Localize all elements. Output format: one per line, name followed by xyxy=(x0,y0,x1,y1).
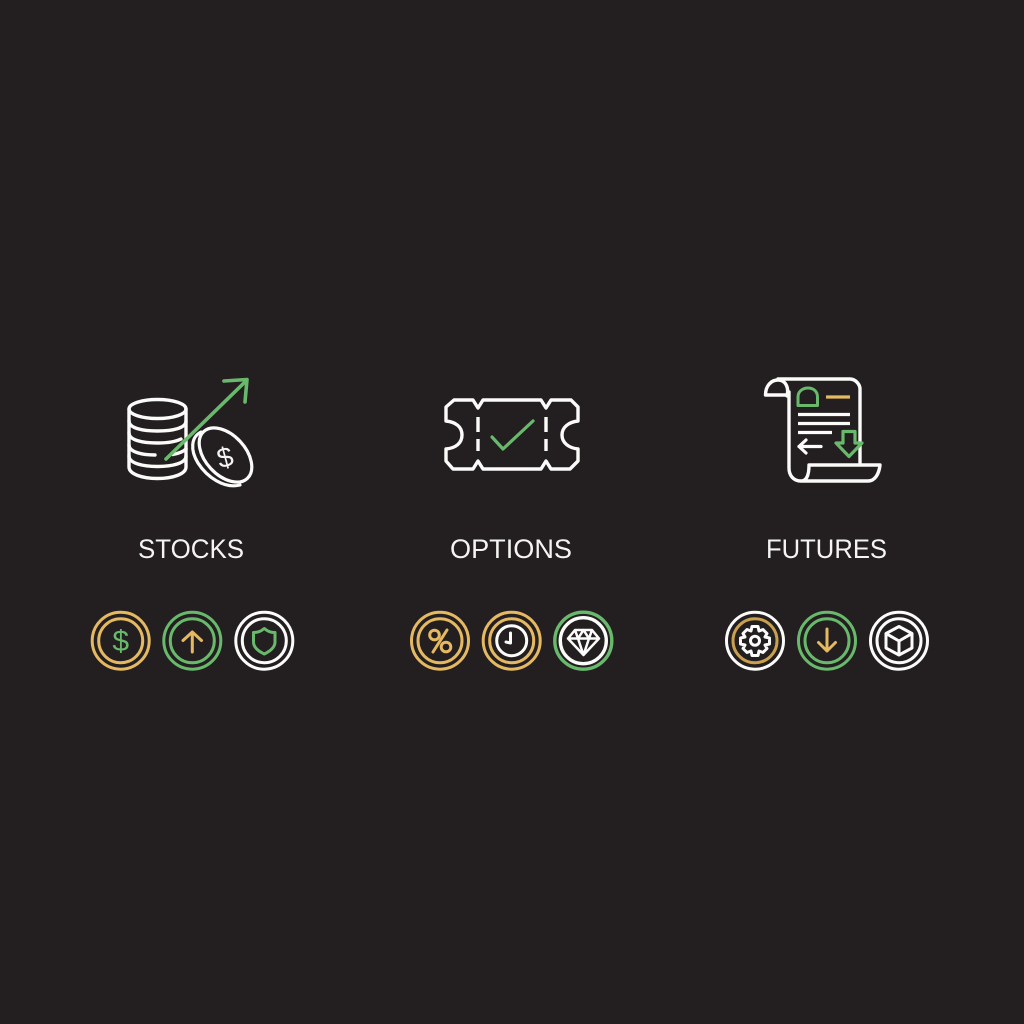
panel: futures xyxy=(726,379,928,669)
icon: coin stack with rising arrow and dollar coin xyxy=(129,380,262,492)
badge: diamond xyxy=(555,612,612,669)
panel: stocks xyxy=(92,380,293,669)
text lines xyxy=(798,414,850,432)
badge: shield xyxy=(236,612,293,669)
ticket outline xyxy=(446,400,578,469)
seal and title line xyxy=(798,388,818,406)
badge: cube xyxy=(870,612,928,669)
growth arrow xyxy=(166,380,247,459)
dollar coin: $ xyxy=(214,440,237,474)
perforation lines xyxy=(478,417,546,451)
badges: stocks xyxy=(92,612,293,669)
badge: gear xyxy=(726,612,784,669)
badge: clock xyxy=(483,612,540,669)
badges: futures xyxy=(726,612,928,669)
badge: percent xyxy=(412,612,468,669)
badges: options xyxy=(412,612,612,669)
check mark xyxy=(492,421,533,449)
label: options: OPTIONS xyxy=(450,534,572,564)
label: stocks: STOCKS xyxy=(138,534,244,564)
badge: dollar: $ xyxy=(112,625,129,658)
icon: ticket with check mark xyxy=(446,400,578,469)
left arrow xyxy=(799,440,821,453)
badge: dollar xyxy=(92,612,149,669)
coin stack xyxy=(129,400,186,478)
down arrow xyxy=(836,432,862,456)
badge: up arrow xyxy=(164,612,221,669)
scroll outline xyxy=(766,379,880,481)
badge: down arrow xyxy=(798,612,856,669)
icon: contract scroll xyxy=(766,379,880,481)
label: futures: FUTURES xyxy=(766,534,887,564)
panel: options xyxy=(412,400,612,669)
